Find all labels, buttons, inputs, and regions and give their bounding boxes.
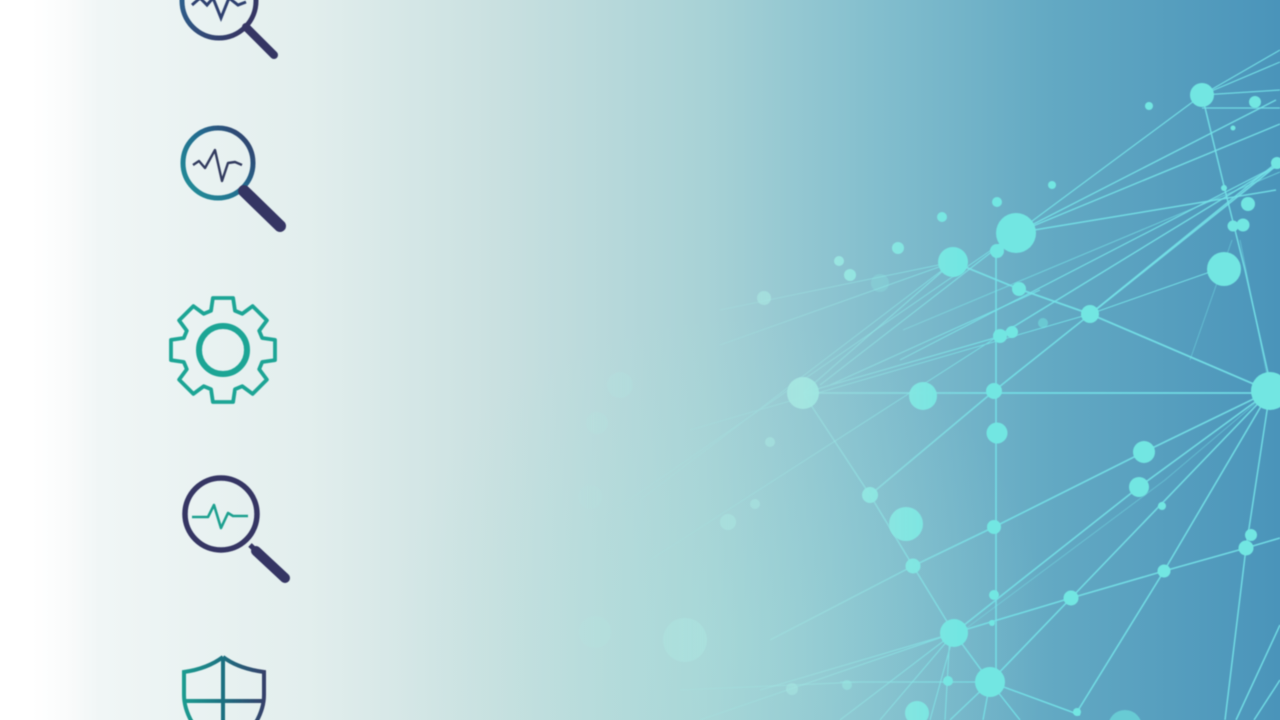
network: connecting lines xyxy=(600,50,1280,720)
icon: shield xyxy=(184,657,264,720)
icon: magnifying glass with teal pulse xyxy=(185,478,285,578)
icon: magnifying glass with pulse xyxy=(183,128,280,226)
icon: gear xyxy=(171,298,275,402)
network: nodes xyxy=(578,83,1280,720)
icon: magnifying glass with pulse (cropped at top) xyxy=(182,0,274,55)
